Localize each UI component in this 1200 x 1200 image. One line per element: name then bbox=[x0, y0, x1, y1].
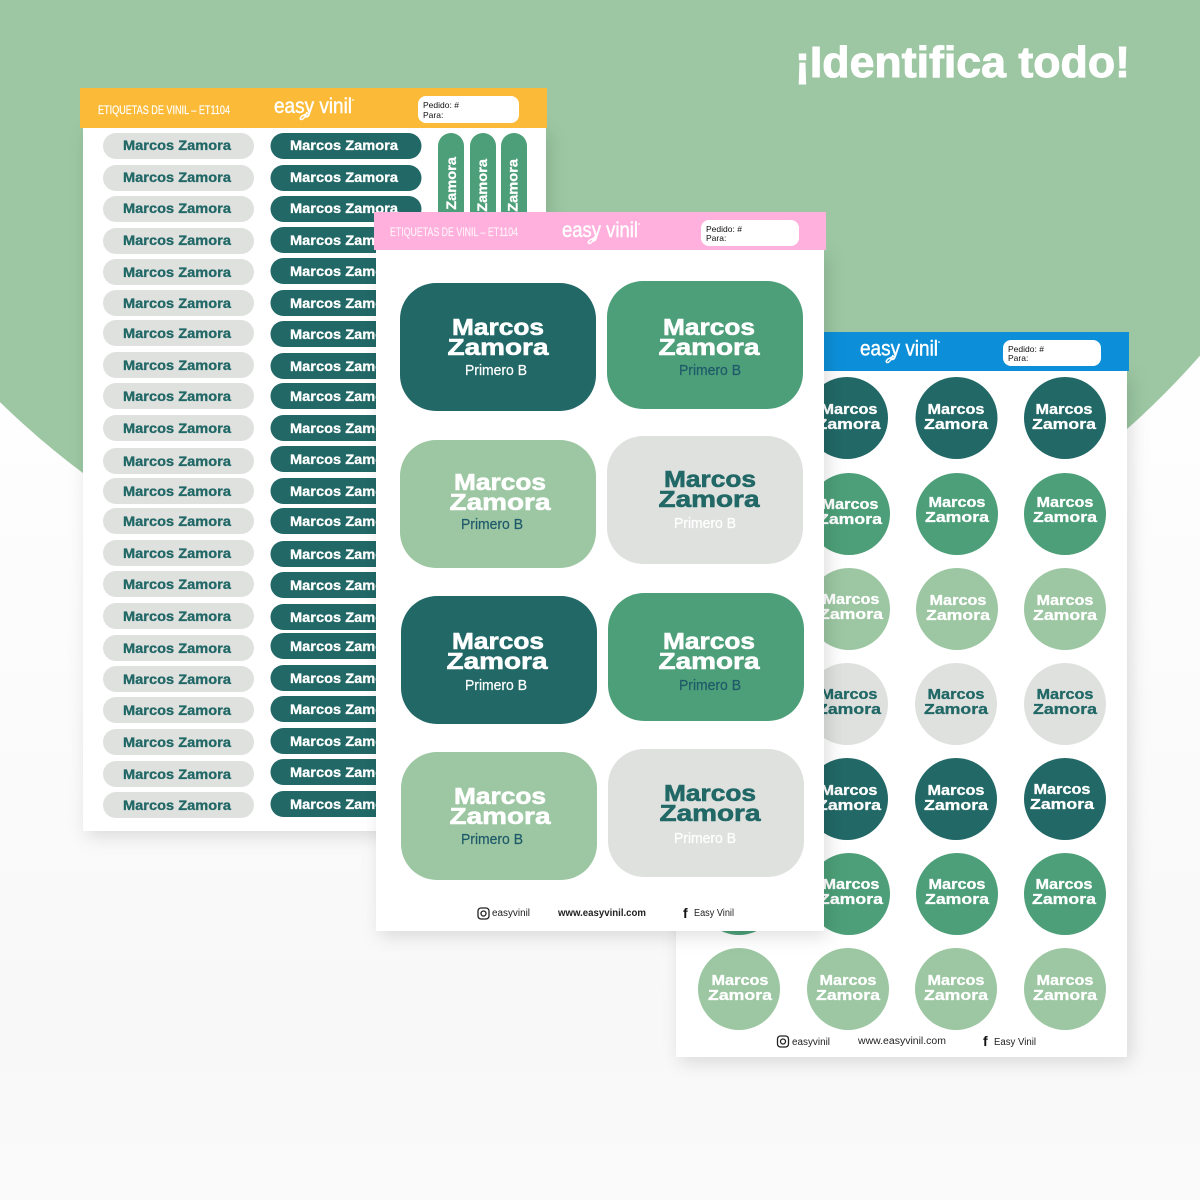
label 3 bbox=[400, 440, 596, 568]
row 3 stickers: Zamora bbox=[1033, 608, 1098, 624]
gray pills column: Marcos Zamora bbox=[123, 608, 231, 624]
page name: Easy Vinil bbox=[694, 908, 734, 919]
logo: easy vinil bbox=[274, 95, 352, 118]
dark pills column: Marcos Zamora bbox=[290, 638, 398, 654]
dark pills column: Marcos Zamora bbox=[290, 764, 398, 780]
gray pills column: Marcos Zamora bbox=[123, 545, 231, 561]
row 4 stickers: Marcos bbox=[1036, 687, 1094, 703]
order box: Pedido: # bbox=[1008, 344, 1044, 354]
row 6 stickers bbox=[698, 853, 1106, 935]
label 3: Zamora bbox=[450, 489, 551, 515]
header bar bbox=[676, 332, 1129, 371]
logo: easy vinil bbox=[562, 219, 638, 242]
dark pills column: Marcos Zamora bbox=[290, 483, 398, 499]
row 5 stickers: Zamora bbox=[1030, 797, 1095, 813]
gray pills column: Marcos Zamora bbox=[123, 388, 231, 404]
label 2: Primero B bbox=[679, 363, 741, 379]
row 2 stickers: Zamora bbox=[1033, 510, 1098, 526]
row 1 stickers: Marcos bbox=[1036, 402, 1092, 418]
gray pills column: Marcos Zamora bbox=[123, 200, 231, 216]
handle: easyvinil bbox=[792, 1037, 830, 1048]
label 7: Zamora bbox=[450, 803, 551, 829]
row 6 stickers: Marcos bbox=[822, 877, 880, 893]
icon: facebook: f bbox=[983, 1033, 988, 1049]
label 5: Primero B bbox=[465, 678, 527, 694]
gray pills column: Marcos Zamora bbox=[123, 232, 231, 248]
title: ¡Identifica todo! bbox=[795, 38, 1130, 87]
row 7 stickers: Marcos bbox=[820, 973, 876, 989]
icon: instagram bbox=[778, 1036, 788, 1047]
footer contacts bbox=[778, 1033, 1036, 1049]
row 7 stickers: Marcos bbox=[928, 973, 984, 989]
gray pills column: Marcos Zamora bbox=[123, 671, 231, 687]
row 4 stickers: Zamora bbox=[817, 702, 882, 718]
row 6 stickers: Zamora bbox=[925, 892, 990, 908]
row 6 stickers: Zamora bbox=[819, 892, 884, 908]
dark pills column: Marcos Zamora bbox=[290, 326, 398, 342]
sheet paper bbox=[676, 371, 1127, 1057]
label 8: Primero B bbox=[674, 831, 736, 847]
label 4: Marcos bbox=[664, 466, 756, 492]
row 5 stickers: Marcos bbox=[1034, 782, 1090, 798]
order box bbox=[701, 220, 799, 246]
order box bbox=[1003, 340, 1101, 366]
row 3 stickers bbox=[808, 568, 1106, 650]
footer contacts bbox=[478, 905, 734, 921]
row 1 stickers: Zamora bbox=[924, 417, 989, 433]
row 5 stickers: Marcos bbox=[820, 783, 878, 799]
row 6 stickers: Marcos bbox=[928, 877, 986, 893]
sheet paper bbox=[83, 128, 546, 831]
dark pills column: Marcos Zamora bbox=[290, 451, 398, 467]
green circle backdrop bbox=[0, 0, 1200, 638]
vertical green pills: Marcos Zamora bbox=[504, 159, 520, 267]
label 5 bbox=[401, 596, 597, 724]
header bar bbox=[374, 212, 826, 250]
gray pills column: Marcos Zamora bbox=[123, 483, 231, 499]
sheet: yellow name strips bbox=[80, 88, 547, 831]
dark pills column: Marcos Zamora bbox=[290, 388, 398, 404]
website: www.easyvinil.com bbox=[557, 908, 646, 919]
dark pills column: Marcos Zamora bbox=[290, 169, 398, 185]
label 7 bbox=[401, 752, 597, 880]
dark pills column: Marcos Zamora bbox=[290, 200, 398, 216]
row 7 stickers: Zamora bbox=[816, 988, 881, 1004]
gray pills column: Marcos Zamora bbox=[123, 325, 231, 341]
order box: Para: bbox=[1008, 353, 1028, 363]
row 3 stickers: Zamora bbox=[926, 608, 991, 624]
row 2 stickers: Zamora bbox=[925, 510, 990, 526]
dark pills column: Marcos Zamora bbox=[290, 609, 398, 625]
icon: instagram bbox=[478, 908, 489, 919]
gray pills column: Marcos Zamora bbox=[123, 576, 231, 592]
row 7 stickers: Zamora bbox=[924, 988, 989, 1004]
gray pills column: Marcos Zamora bbox=[123, 137, 231, 153]
label 4: Zamora bbox=[658, 486, 760, 512]
row 1 stickers: Zamora bbox=[1032, 417, 1097, 433]
row 4 stickers: Zamora bbox=[1033, 702, 1098, 718]
label 1: Marcos bbox=[452, 314, 544, 340]
dark pills column: Marcos Zamora bbox=[290, 263, 398, 279]
gray pills column: Marcos Zamora bbox=[123, 640, 231, 656]
row 3 stickers: Zamora bbox=[819, 607, 884, 623]
gray pills column: Marcos Zamora bbox=[123, 169, 231, 185]
row 5 stickers: Zamora bbox=[817, 798, 882, 814]
order box: Para: bbox=[423, 110, 443, 120]
label 1: Primero B bbox=[465, 363, 527, 379]
row 4 stickers bbox=[806, 663, 1106, 745]
label 3: Primero B bbox=[461, 517, 523, 533]
order box: Pedido: # bbox=[423, 100, 459, 110]
dark pills column: Marcos Zamora bbox=[290, 295, 398, 311]
label 6: Primero B bbox=[679, 678, 741, 694]
gray pills column: Marcos Zamora bbox=[123, 797, 231, 813]
gray pills column: Marcos Zamora bbox=[123, 734, 231, 750]
label 1: Zamora bbox=[448, 334, 549, 360]
label 7: Primero B bbox=[461, 832, 523, 848]
gray pills column: Marcos Zamora bbox=[123, 453, 231, 469]
dark pills column: Marcos Zamora bbox=[290, 796, 398, 812]
dark pills column: Marcos Zamora bbox=[290, 420, 398, 436]
row 2 stickers: Zamora bbox=[818, 512, 883, 528]
row 1 stickers bbox=[806, 377, 1106, 459]
sheet paper bbox=[376, 250, 824, 931]
row 2 stickers bbox=[808, 473, 1106, 555]
row 6 stickers: Zamora bbox=[1032, 892, 1097, 908]
dark pills column: Marcos Zamora bbox=[290, 513, 398, 529]
row 3 stickers: Marcos bbox=[822, 592, 880, 608]
vertical green pills: Marcos Zamora bbox=[443, 157, 459, 265]
row 1 stickers: Zamora bbox=[816, 417, 882, 433]
label 1 bbox=[400, 283, 596, 411]
gray pills column: Marcos Zamora bbox=[123, 357, 231, 373]
label 8: Marcos bbox=[664, 780, 756, 806]
row 4 stickers: Zamora bbox=[924, 702, 989, 718]
row 7 stickers: Marcos bbox=[1036, 973, 1094, 989]
row 7 stickers: Zamora bbox=[1033, 988, 1098, 1004]
row 2 stickers: Marcos bbox=[822, 497, 878, 513]
gray pills column: Marcos Zamora bbox=[123, 264, 231, 280]
label 5: Zamora bbox=[446, 648, 548, 674]
row 2 stickers: Marcos bbox=[928, 495, 986, 511]
gray pills column bbox=[103, 133, 254, 818]
row 7 stickers: Marcos bbox=[712, 973, 768, 989]
label 6: Zamora bbox=[658, 648, 760, 674]
gray pills column: Marcos Zamora bbox=[123, 420, 231, 436]
row 1 stickers: Marcos bbox=[820, 402, 878, 418]
order box: Para: bbox=[706, 233, 726, 243]
dark pills column: Marcos Zamora bbox=[290, 670, 398, 686]
dark pills column: Marcos Zamora bbox=[290, 137, 398, 153]
label 8: Zamora bbox=[660, 800, 761, 826]
label 2: Marcos bbox=[663, 314, 755, 340]
row 6 stickers: Marcos bbox=[1036, 877, 1092, 893]
row 5 stickers: Marcos bbox=[928, 783, 984, 799]
label 3: Marcos bbox=[454, 469, 546, 495]
label 6: Marcos bbox=[663, 628, 755, 654]
row 1 stickers: Marcos bbox=[928, 402, 984, 418]
row 7 stickers: Zamora bbox=[708, 988, 773, 1004]
logo: easy vinil bbox=[860, 338, 938, 360]
row 3 stickers: Marcos bbox=[930, 593, 986, 609]
label 8 bbox=[608, 749, 804, 877]
label 2 bbox=[607, 281, 803, 409]
label 7: Marcos bbox=[454, 783, 546, 809]
label 4 bbox=[607, 436, 803, 564]
vertical green pills bbox=[438, 133, 527, 293]
header label: ETIQUETAS DE VINIL – ET1104 bbox=[390, 225, 518, 239]
row 5 stickers: Zamora bbox=[924, 798, 989, 814]
page name: Easy Vinil bbox=[994, 1037, 1036, 1048]
handle: easyvinil bbox=[492, 908, 530, 919]
label 5: Marcos bbox=[452, 628, 544, 654]
row 7 stickers bbox=[698, 948, 1106, 1030]
label 4: Primero B bbox=[674, 516, 736, 532]
dark pills column: Marcos Zamora bbox=[290, 546, 398, 562]
gray pills column: Marcos Zamora bbox=[123, 702, 231, 718]
dark pills column: Marcos Zamora bbox=[290, 577, 398, 593]
order box: Pedido: # bbox=[706, 224, 742, 234]
icon: facebook: f bbox=[683, 905, 688, 921]
row 5 stickers bbox=[806, 758, 1106, 840]
gray pills column: Marcos Zamora bbox=[123, 295, 231, 311]
dark pills column: Marcos Zamora bbox=[290, 733, 398, 749]
row 3 stickers: Marcos bbox=[1036, 593, 1094, 609]
header bar bbox=[80, 88, 547, 128]
header label: ETIQUETAS DE VINIL – ET1104 bbox=[98, 103, 230, 117]
dark pills column: Marcos Zamora bbox=[290, 701, 398, 717]
order box bbox=[418, 96, 519, 123]
label 6 bbox=[608, 593, 804, 721]
vertical green pills: Marcos Zamora bbox=[474, 159, 490, 267]
sheet: pink large labels bbox=[374, 212, 826, 931]
dark pills column: Marcos Zamora bbox=[290, 358, 398, 374]
dark pills column: Marcos Zamora bbox=[290, 232, 398, 248]
row 4 stickers: Marcos bbox=[820, 687, 878, 703]
gray pills column: Marcos Zamora bbox=[123, 766, 231, 782]
dark pills column bbox=[270, 133, 422, 817]
sheet: blue round stickers bbox=[676, 332, 1129, 1057]
gray pills column: Marcos Zamora bbox=[123, 513, 231, 529]
label 2: Zamora bbox=[658, 334, 760, 360]
row 2 stickers: Marcos bbox=[1036, 495, 1094, 511]
row 4 stickers: Marcos bbox=[928, 687, 984, 703]
website: www.easyvinil.com bbox=[857, 1036, 946, 1047]
